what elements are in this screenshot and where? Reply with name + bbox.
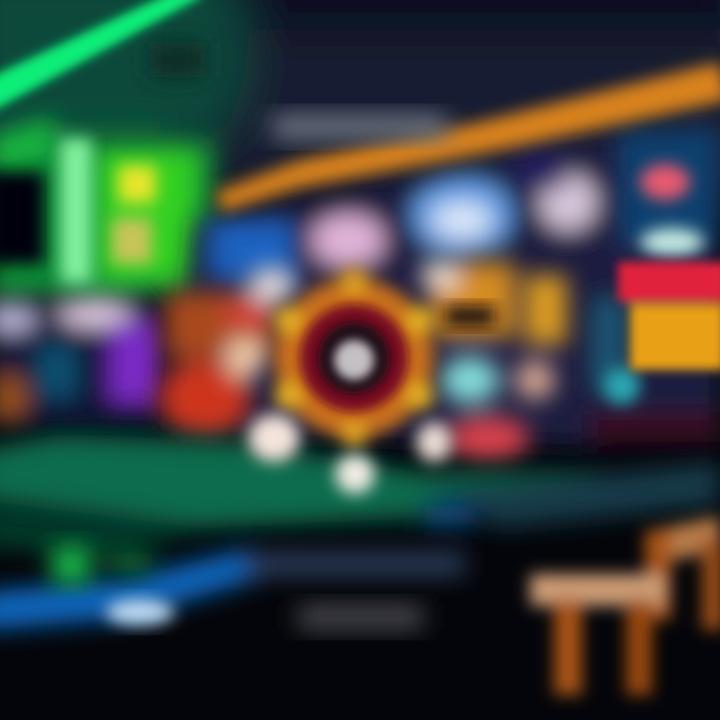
wooden chair xyxy=(530,516,720,695)
white chips on table edge xyxy=(248,414,452,494)
red and yellow side panel xyxy=(618,262,720,370)
black screen xyxy=(0,172,44,264)
neon green ceiling stripe xyxy=(0,0,205,118)
ceiling background xyxy=(0,0,720,200)
grey floor reflection xyxy=(298,604,423,630)
dark slot on right cluster xyxy=(445,306,495,326)
yellow sign xyxy=(112,165,156,264)
panel details xyxy=(604,164,704,404)
left slot machines xyxy=(0,297,165,425)
light green bar xyxy=(60,138,92,283)
orange ceiling stripe xyxy=(215,62,720,212)
roulette wheel xyxy=(274,268,434,448)
back wall of game panels xyxy=(170,120,720,445)
green wall panel xyxy=(0,118,215,300)
white reflection xyxy=(106,599,174,625)
grey sign above wall xyxy=(272,114,447,140)
blue floor light streak xyxy=(0,505,475,630)
right game cluster xyxy=(420,261,567,460)
green table xyxy=(0,434,720,558)
dark ceiling fixtures xyxy=(30,42,205,140)
green floor glow xyxy=(52,546,152,584)
left game cluster xyxy=(159,267,296,436)
